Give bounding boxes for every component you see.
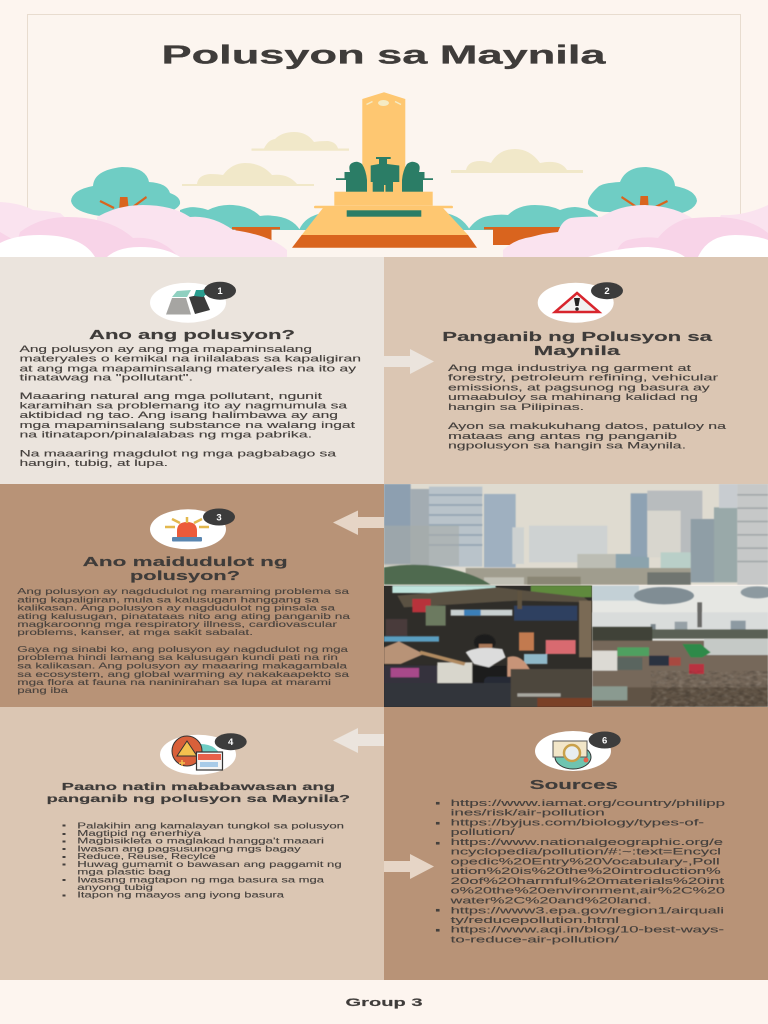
photo: damaged home — [384, 586, 592, 707]
panel: Paano mababawasan — [0, 707, 384, 980]
text block: Gaya ng sinabi ko, ang polusyon ay nagdudulot ng mga — [17, 645, 349, 654]
text block: Na maaaring magdulot ng mga pagbabago sa — [20, 448, 337, 458]
heading — [47, 781, 350, 805]
list: https://www.aqi.in/blog/10-best-ways- — [451, 925, 724, 935]
list: water%2C%20and%20land. — [449, 895, 652, 905]
icon: warning and document — [160, 733, 247, 775]
pink clouds right — [503, 205, 768, 257]
text block: magkaroonng mga respiratory illness, cardiovascular — [17, 620, 337, 629]
list: Reduce, Reuse, Recylce — [77, 852, 216, 861]
list: mga plastic bag — [77, 868, 171, 877]
text block: problema hindi lamang sa kalusugan kundi pati na rin — [17, 653, 339, 662]
list: https://byjus.com/biology/types-of- — [451, 817, 704, 827]
heading: Panganib ng Polusyon sa — [442, 329, 713, 344]
panel: Ano ang polusyon — [0, 257, 384, 484]
heading: Paano natin mababawasan ang — [62, 781, 335, 793]
text block: Ang mga industriya ng garment at — [448, 363, 692, 373]
arrow: panel 2 to panel 3 — [333, 510, 384, 535]
text block: pang iba — [17, 686, 69, 695]
list: Palakihin ang kamalayan tungkol sa polusyon — [77, 821, 345, 830]
photos — [166, 484, 768, 768]
text block: tinatawag na "pollutant". — [20, 373, 193, 383]
text block: ating kalusugan, pinatataas nito ang ating panganib na — [17, 612, 351, 621]
icon: waste bags — [150, 282, 236, 323]
clouds — [182, 132, 583, 186]
text block — [448, 363, 728, 451]
list: 20of%20harmful%20materials%20int — [451, 876, 725, 886]
arrow: panel 3 to panel 4 — [333, 728, 384, 753]
list: anyong tubig — [77, 883, 154, 892]
heading — [83, 554, 288, 583]
list: https://www.nationalgeographic.org/e — [451, 837, 723, 847]
heading: Maynila — [534, 343, 621, 358]
center figure — [371, 157, 399, 194]
title: Polusyon sa Maynila — [162, 40, 606, 70]
text block: materyales o kemikal na inilalabas sa kapaligiran — [20, 354, 361, 364]
text block: mga mapaminsalang substance na walang ingat — [20, 420, 356, 430]
text block: sa ecosystem, ang global warming ay nakakaapekto sa — [17, 670, 350, 679]
arrow: panel 1 to panel 2 — [384, 349, 434, 374]
text block: mataas ang antas ng panganib — [448, 431, 677, 441]
text block: mga flora at fauna na naninirahan sa lupa at marami — [17, 678, 331, 687]
panel: Ano maidudulot ng polusyon — [0, 484, 384, 707]
text block — [20, 344, 361, 468]
trees — [71, 167, 697, 217]
list: Iwasang magtapon ng mga basura sa mga — [77, 875, 325, 884]
list: Itapon ng maayos ang iyong basura — [77, 891, 285, 900]
icon: waste bags: 1 — [217, 286, 223, 297]
heading — [442, 329, 713, 358]
text block: kalikasan. Ang polusyon ay nagdudulot ng pinsala sa — [17, 604, 336, 613]
text block: hangin, tubig, at lupa. — [20, 458, 168, 468]
header — [0, 14, 768, 264]
text block: umaabuloy sa mahinang kalidad ng — [448, 392, 698, 402]
list: ncyclopedia/pollution/#:~:text=Encycl — [451, 846, 721, 856]
list: to-reduce-air-pollution/ — [451, 934, 620, 944]
text block: Ang polusyon ay nagdudulot ng maraming problema sa — [17, 587, 350, 596]
footer text: Group 3 — [346, 997, 422, 1009]
list: https://www3.epa.gov/region1/airquali — [451, 905, 724, 915]
list: Magbisikleta o maglakad hangga't maaari — [77, 837, 324, 846]
photo: smoggy skyline — [384, 484, 768, 585]
list: Iwasan ang pagsusunogng mgs bagay — [77, 844, 302, 853]
text block: aktibidad ng tao. Ang isang halimbawa ay ang — [20, 410, 338, 420]
heading: panganib ng polusyon sa Maynila? — [47, 793, 350, 805]
photo: garbage shoreline — [592, 586, 768, 707]
icon: warning triangle: 2 — [604, 286, 610, 297]
list: ty/reducepollution.html — [451, 915, 619, 925]
icon: magnifier on browser — [535, 731, 621, 771]
icon: siren — [150, 508, 235, 549]
icon: warning and document: 4 — [228, 737, 234, 748]
text block: Maaaring natural ang mga pollutant, ngunit — [20, 391, 323, 401]
list: https://www.iamat.org/country/philipp — [451, 798, 725, 808]
bushes — [180, 205, 598, 230]
heading: Ano ang polusyon? — [89, 327, 295, 342]
list: opedic%20Entry%20Vocabulary-,Poll — [451, 856, 720, 866]
list — [436, 798, 725, 944]
text block — [17, 587, 351, 695]
icon: magnifier on browser: 6 — [602, 736, 607, 746]
text block: Ang polusyon ay ang mga mapaminsalang — [20, 344, 312, 354]
text block: emissions, at pagsunog ng basura ay — [448, 383, 710, 393]
text block: ating kapaligiran, mula sa kalusugan hanggang sa — [17, 596, 320, 604]
list: o%20the%20environment,air%2C%20 — [451, 886, 725, 896]
heading: Sources — [530, 777, 618, 792]
monument — [292, 92, 477, 248]
text block: karamihan sa problemang ito ay nagmumula sa — [20, 400, 348, 410]
arrow: panel 4 to sources — [384, 854, 434, 879]
text block: sa kalikasan. Ang polusyon ay maaaring makagambala — [17, 662, 348, 670]
orange platforms — [232, 227, 561, 246]
text block: problems, kanser, at mga sakit sabalat. — [17, 628, 253, 637]
text block: ngpolusyon sa hangin sa Maynila. — [448, 441, 686, 451]
pink clouds left — [0, 202, 287, 257]
panel: Sources — [384, 707, 768, 980]
heading: Ano maidudulot ng — [83, 554, 288, 569]
list — [62, 821, 345, 900]
text block: forestry, petroleum refining, vehicular — [448, 373, 718, 383]
list: pollution/ — [451, 827, 515, 837]
list: Magtipid ng enerhiya — [77, 829, 202, 838]
icon: warning triangle — [538, 282, 623, 323]
icon: siren: 3 — [216, 512, 222, 524]
text block: hangin sa Pilipinas. — [448, 402, 584, 412]
list: Huwag gumamit o bawasan ang paggamit ng — [77, 860, 342, 869]
heading: polusyon? — [130, 568, 240, 583]
list: ution%20is%20the%20introduction% — [451, 866, 721, 876]
text block: na itinatapon/pinalalabas ng mga pabrika. — [20, 430, 312, 440]
text block: Ayon sa makukuhang datos, patuloy na — [448, 421, 728, 431]
text block: at ang mga mapaminsalang materyales na ito ay — [20, 363, 357, 373]
list: ines/risk/air-pollution — [451, 807, 605, 817]
panel: Panganib ng Polusyon sa Maynila — [384, 257, 768, 484]
